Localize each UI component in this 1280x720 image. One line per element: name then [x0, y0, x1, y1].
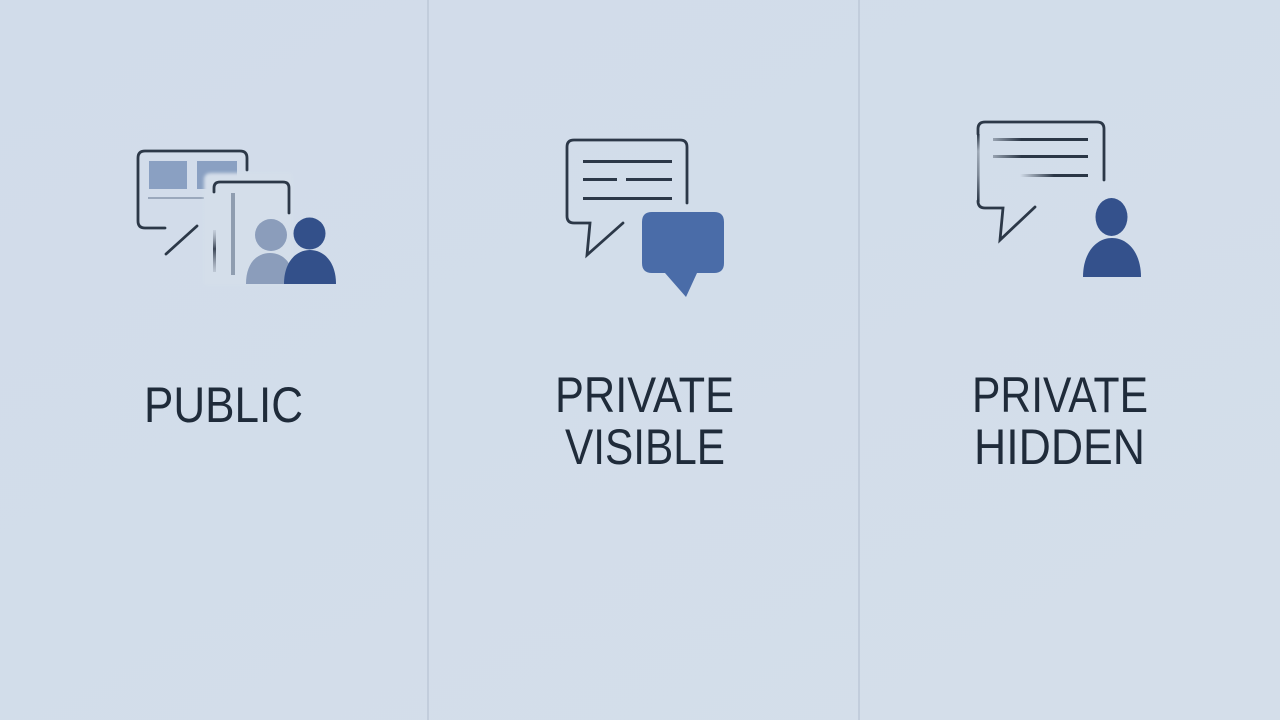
label line: private: PRIVATE	[555, 367, 734, 423]
panel: private hidden	[972, 122, 1148, 475]
front card inner bar	[231, 193, 235, 275]
outline: front card	[214, 182, 289, 213]
label: private hidden	[972, 367, 1148, 475]
label: public: PUBLIC	[144, 377, 303, 433]
text line: third	[1020, 174, 1088, 177]
divider: left	[427, 0, 429, 720]
person	[1083, 198, 1141, 277]
text line: first	[993, 138, 1088, 141]
outline: back window	[138, 151, 247, 228]
text line: second right	[626, 178, 672, 181]
text line: third	[583, 197, 672, 200]
image block: first	[149, 161, 187, 189]
caption line	[148, 197, 204, 199]
outline bubble	[567, 140, 687, 255]
label line: private: PRIVATE	[972, 367, 1148, 423]
filled bubble	[642, 212, 724, 297]
panel: private visible	[555, 140, 734, 475]
divider: right	[858, 0, 860, 720]
icon: public content and audience	[138, 151, 336, 285]
text line: second	[993, 155, 1088, 158]
outline bubble: left fade	[977, 134, 980, 202]
image block: second	[197, 161, 237, 189]
text line: second left	[583, 178, 617, 181]
panel: public	[138, 151, 336, 433]
text line: first	[583, 160, 672, 163]
label line: visible: VISIBLE	[565, 419, 725, 475]
outline bubble: tail	[978, 201, 1035, 240]
person: light	[246, 219, 294, 284]
front card backing	[204, 173, 292, 285]
icon: bubble and hidden person	[977, 122, 1141, 277]
outline bubble: top and right	[978, 122, 1104, 180]
front card left edge	[213, 230, 216, 272]
pointer stroke	[166, 226, 197, 254]
icon: speech bubbles	[567, 140, 724, 297]
label: private visible	[555, 367, 734, 475]
person: dark	[284, 218, 336, 284]
label line: hidden: HIDDEN	[974, 419, 1145, 475]
